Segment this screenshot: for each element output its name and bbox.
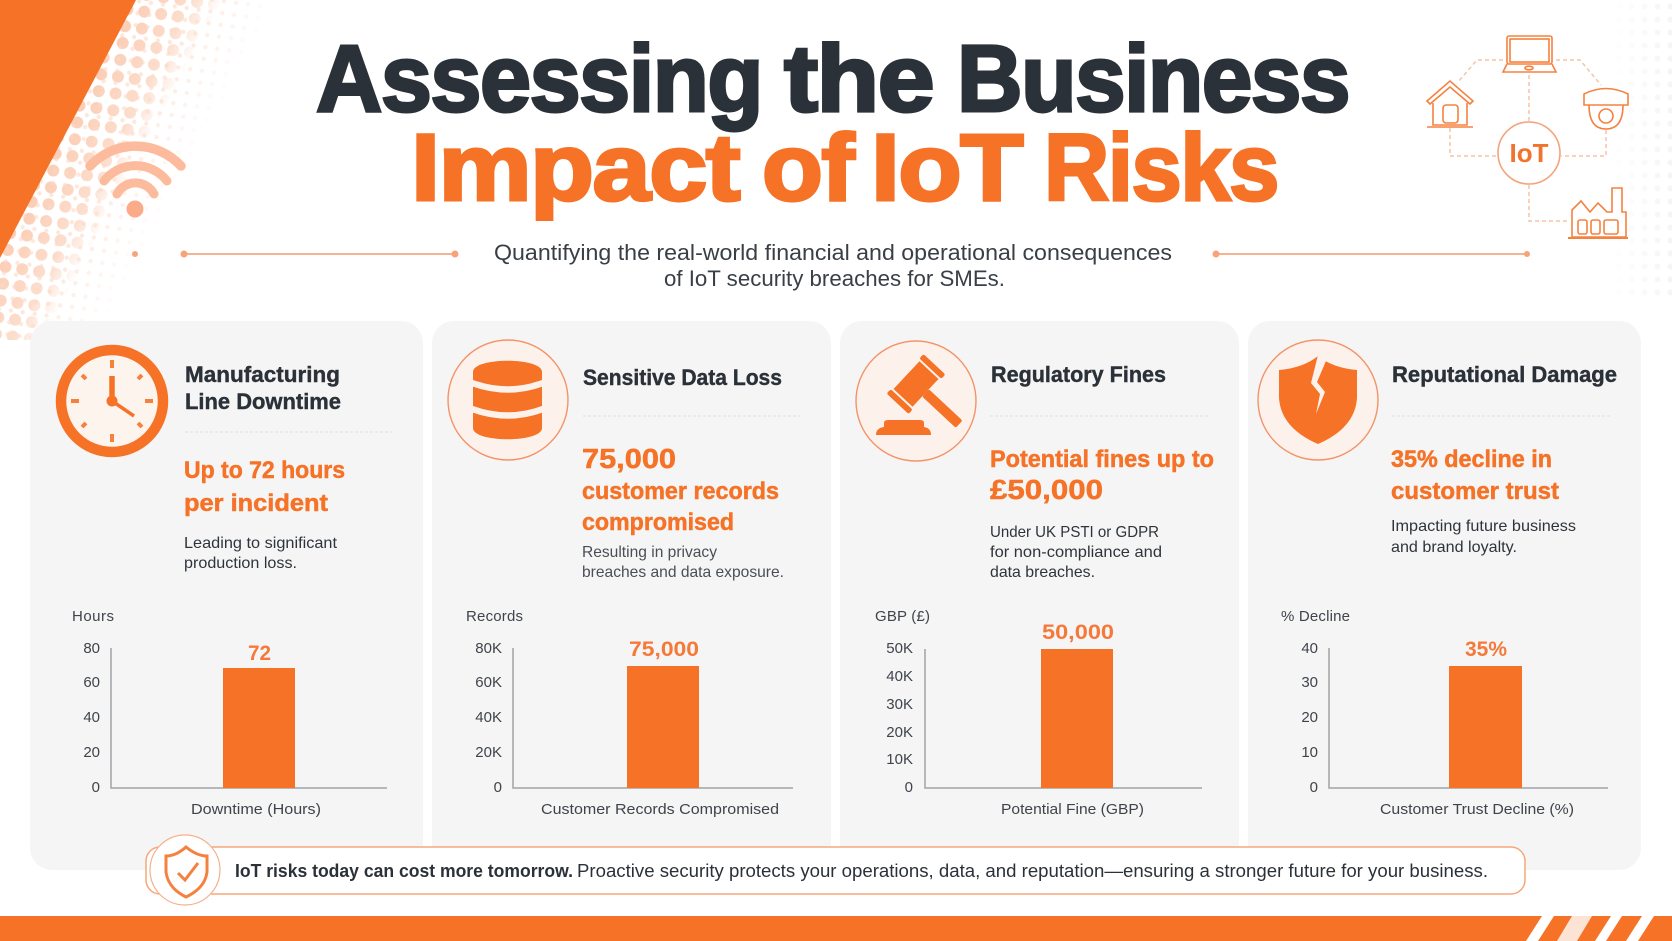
title: Assessing	[316, 26, 762, 132]
title: Risks	[1044, 115, 1278, 221]
bar chart: downtime: 0	[92, 779, 100, 796]
description	[1391, 518, 1576, 556]
key figure	[990, 446, 1214, 505]
bar chart: downtime: 20	[83, 744, 100, 761]
bar chart: customer trust	[1281, 608, 1608, 818]
title: of	[762, 115, 855, 221]
heading: Sensitive Data Loss	[583, 365, 782, 390]
bar chart: customer records: 0	[494, 779, 502, 796]
key figure: Up to 72 hours	[184, 457, 345, 484]
bar chart: potential fine: GBP (£)	[875, 608, 930, 625]
corner halftone and orange triangle	[0, 0, 250, 340]
footer bar	[0, 916, 1672, 941]
bar chart: potential fine: 0	[905, 779, 913, 796]
key figure: customer trust	[1391, 478, 1559, 505]
callout text: Proactive security protects your operations, data, and reputation—ensuring a stronger future for your business.	[577, 861, 1488, 881]
description: production loss.	[184, 555, 297, 572]
bar chart: customer records: 75,000	[629, 638, 699, 661]
bar chart: downtime	[72, 608, 387, 818]
panel: sensitive data loss	[432, 321, 831, 870]
bar chart: potential fine: 20K	[886, 724, 913, 741]
bar chart: downtime: 60	[83, 674, 100, 691]
key figure: 35% decline in	[1391, 446, 1552, 473]
bar chart: customer trust: 0	[1310, 779, 1318, 796]
heading: Reputational Damage	[1392, 362, 1617, 387]
title	[316, 26, 1349, 221]
icon: IoT network diagram: IoT	[1510, 138, 1549, 168]
bar chart: customer records: Records	[466, 608, 523, 625]
bar chart: potential fine: 10K	[886, 751, 913, 768]
subtitle	[494, 240, 1172, 291]
bar chart: potential fine: Potential Fine (GBP)	[1001, 801, 1144, 818]
key figure	[184, 457, 345, 517]
bar chart: potential fine: 40K	[886, 668, 913, 685]
icon: IoT network diagram	[1427, 36, 1628, 238]
bar chart: customer records: 40K	[475, 709, 502, 726]
description: and brand loyalty.	[1391, 539, 1517, 556]
bar chart: downtime: 80	[83, 640, 100, 657]
icon: shield check	[150, 835, 220, 905]
callout text: IoT risks today can cost more tomorrow.	[235, 861, 573, 881]
subtitle: Quantifying the real-world financial and operational consequences	[494, 240, 1172, 265]
panel: manufacturing line downtime	[30, 321, 423, 870]
title: IoT	[871, 115, 1024, 221]
bar chart: potential fine: 50K	[886, 640, 913, 657]
panel: reputational damage	[1248, 321, 1641, 870]
description: Impacting future business	[1391, 518, 1576, 535]
right divider line	[1212, 250, 1530, 258]
callout banner	[146, 835, 1525, 905]
bar chart: customer records	[466, 608, 793, 818]
key figure: customer records	[582, 478, 779, 505]
key figure: compromised	[582, 509, 734, 536]
icon: wifi	[90, 146, 181, 218]
key figure	[582, 443, 779, 536]
icon: cracked shield	[1258, 340, 1378, 460]
title: Impact	[411, 115, 740, 221]
title: Business	[957, 26, 1349, 132]
bar chart: customer trust: 35%	[1465, 638, 1507, 661]
bar chart: customer trust: 10	[1301, 744, 1318, 761]
bar chart: potential fine: 50,000	[1042, 621, 1114, 644]
bar chart: downtime: 72	[248, 642, 271, 665]
description: data breaches.	[990, 564, 1095, 581]
bar chart: downtime: 40	[83, 709, 100, 726]
title: the	[784, 26, 933, 132]
bar chart: customer trust: 20	[1301, 709, 1318, 726]
description: for non-compliance and	[990, 544, 1162, 561]
description: Leading to significant	[184, 535, 338, 552]
icon: database	[448, 340, 568, 460]
icon: clock	[61, 350, 163, 452]
bar chart: customer records: 80K	[475, 640, 502, 657]
bar chart: customer trust: Customer Trust Decline (%)	[1380, 801, 1574, 818]
subtitle: of IoT security breaches for SMEs.	[664, 266, 1005, 291]
bar chart: customer trust: % Decline	[1281, 608, 1350, 625]
key figure: £50,000	[990, 474, 1103, 505]
heading: Manufacturing	[185, 362, 340, 387]
key figure: 75,000	[582, 443, 676, 474]
bar chart: downtime: Hours	[72, 608, 114, 625]
key figure	[1391, 446, 1559, 505]
bar chart: customer records: Customer Records Compromised	[541, 801, 779, 818]
bar chart: customer trust: 40	[1301, 640, 1318, 657]
heading	[185, 362, 341, 414]
heading: Line Downtime	[185, 389, 341, 414]
key figure: per incident	[184, 490, 328, 517]
icon: gavel	[856, 341, 978, 461]
bar chart: customer records: 60K	[475, 674, 502, 691]
bar chart: customer trust: 30	[1301, 674, 1318, 691]
bar chart: customer records: 20K	[475, 744, 502, 761]
description	[990, 524, 1162, 581]
left divider line	[132, 250, 458, 258]
bar chart: potential fine	[875, 608, 1202, 818]
description: Under UK PSTI or GDPR	[990, 524, 1159, 541]
description	[582, 544, 784, 581]
description	[184, 535, 338, 572]
description: breaches and data exposure.	[582, 564, 784, 581]
bar chart: potential fine: 30K	[886, 696, 913, 713]
bar chart: downtime: Downtime (Hours)	[191, 801, 321, 818]
key figure: Potential fines up to	[990, 446, 1214, 473]
heading: Regulatory Fines	[991, 362, 1166, 387]
description: Resulting in privacy	[582, 544, 717, 561]
panel: regulatory fines	[840, 321, 1239, 870]
